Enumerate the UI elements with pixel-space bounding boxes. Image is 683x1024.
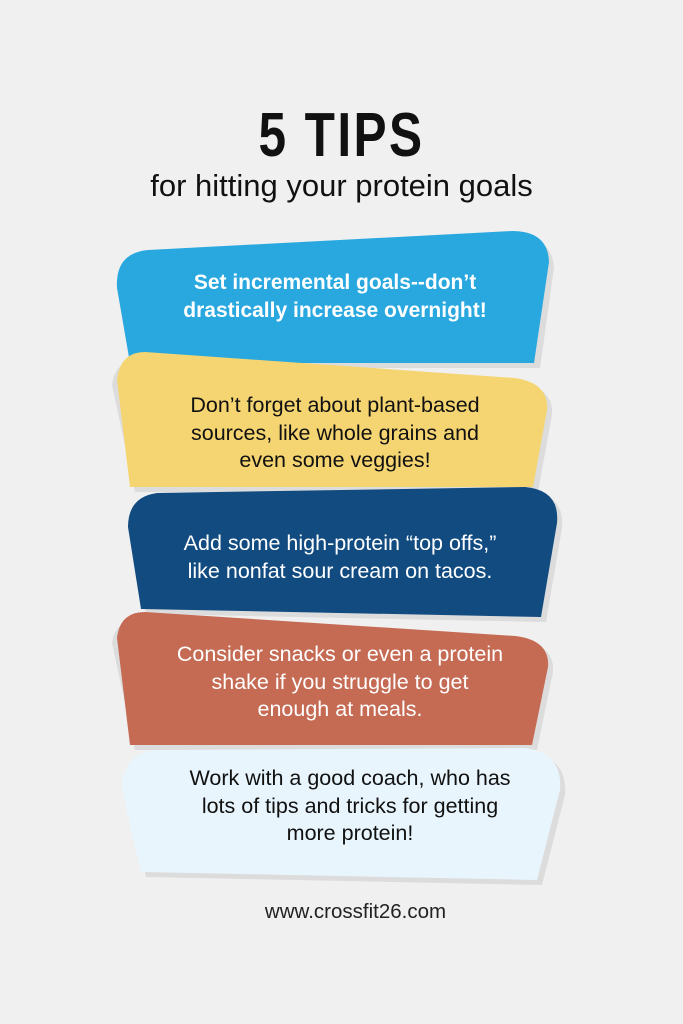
panel shape: yellow (117, 352, 547, 487)
tip 1 text: Set incremental goals--don’t (194, 271, 476, 294)
tip 1 text: drastically increase overnight! (183, 298, 487, 322)
tip 3 text: Add some high-protein “top offs,” (184, 531, 496, 555)
panel shape: dark blue (128, 487, 557, 617)
tip 2 text: Don’t forget about plant-based (190, 393, 480, 417)
panel shape: light blue (122, 748, 560, 880)
title: 5 TIPS (258, 101, 424, 170)
tip 5 text: Work with a good coach, who has (189, 766, 511, 790)
tip 2 text: sources, like whole grains and (191, 420, 479, 444)
tip 4 text (177, 642, 503, 721)
footer url: www.crossfit26.com (265, 900, 446, 923)
tip 4 text: enough at meals. (258, 697, 422, 721)
tip 3 text (184, 531, 496, 582)
subtitle: for hitting your protein goals (150, 168, 533, 203)
panel shape: blue (117, 231, 549, 363)
tip 2 text: even some veggies! (239, 448, 431, 472)
tip 3 text: like nonfat sour cream on tacos. (188, 558, 492, 582)
panel shape: orange (117, 612, 548, 745)
tip 4 text: shake if you struggle to get (212, 670, 468, 694)
tip 5 text (189, 766, 511, 845)
tip 4 text: Consider snacks or even a protein (177, 642, 503, 666)
tip 5 text: more protein! (287, 821, 413, 845)
tip 2 text (190, 393, 480, 472)
tip 1 text (183, 271, 487, 322)
tip 5 text: lots of tips and tricks for getting (202, 794, 498, 818)
